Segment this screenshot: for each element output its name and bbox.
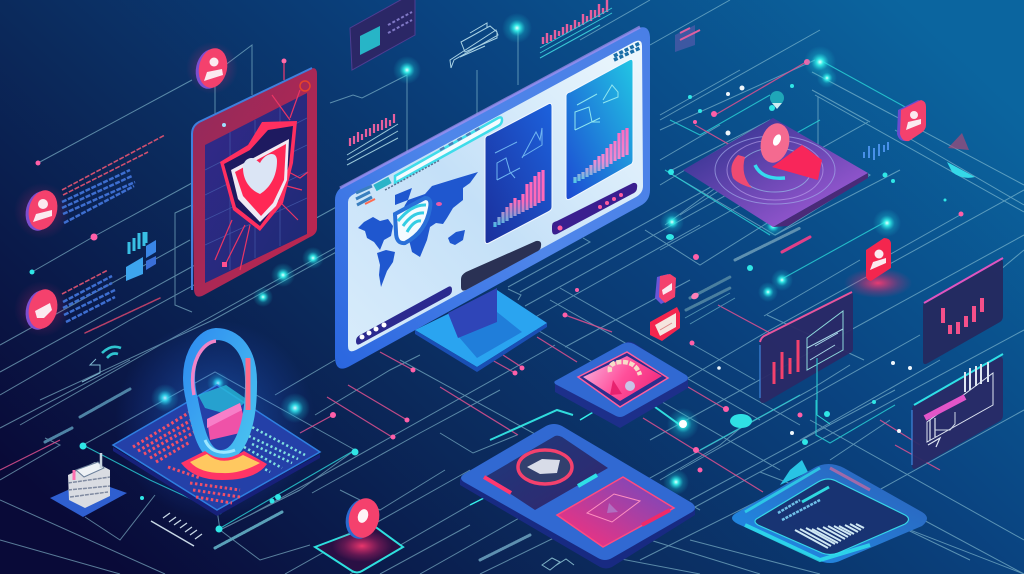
top printer line icon (450, 23, 498, 68)
antenna on tablet (282, 59, 286, 80)
logo glyphs (356, 180, 390, 205)
world map (358, 172, 478, 287)
icon: lock badge left (14, 281, 70, 337)
bottom purple control bar (356, 286, 452, 345)
white nodes (717, 86, 912, 435)
small status marks (222, 262, 227, 267)
chip top (113, 385, 320, 510)
glowing arc (181, 451, 267, 480)
camera glyph (300, 81, 310, 91)
glowing nodes (151, 13, 901, 505)
right purple bar (552, 183, 637, 234)
icon: person left (14, 183, 70, 239)
node dots (36, 58, 964, 472)
chip base side (113, 447, 320, 516)
chart panel A (760, 292, 853, 424)
shield white band (231, 139, 289, 222)
radar platform (683, 118, 868, 227)
corner glyphs (614, 43, 640, 60)
pink traces (0, 62, 940, 492)
chart panel two (566, 59, 633, 200)
radar pin (757, 120, 793, 166)
chip bottom dots (168, 467, 240, 503)
tablet body (192, 68, 317, 297)
chart panel C (912, 354, 1003, 469)
search bar (395, 117, 502, 183)
chip right dots (232, 425, 305, 472)
wifi shield (395, 198, 430, 243)
center chip icon (554, 342, 688, 428)
tablet blue edge (192, 68, 312, 290)
shield outer (220, 121, 297, 231)
dashed text traces (45, 228, 810, 560)
red pie (772, 145, 822, 180)
chart panel B (923, 258, 1003, 364)
wifi icon lower-left (82, 347, 121, 382)
monitor screen (348, 41, 643, 351)
globe node above radar (770, 91, 784, 109)
cyan node circle (730, 414, 752, 428)
decorative triangle top right (947, 133, 975, 178)
screen grid (205, 106, 307, 270)
cyan traces (83, 60, 925, 530)
circuit branches (215, 90, 308, 270)
pink arc (731, 155, 752, 188)
card: shield circle (484, 436, 608, 510)
lock body (207, 403, 244, 440)
small toolbar marks (385, 128, 480, 190)
lock shackle (189, 334, 251, 456)
chart panel one (485, 103, 552, 244)
icon: blue bar blocks (126, 232, 156, 281)
small badge: top (655, 274, 676, 304)
icon: person top (186, 42, 238, 94)
text block: left upper (62, 135, 165, 223)
dark bar (461, 241, 541, 291)
monitor (335, 27, 650, 369)
icon: person badge with glow (844, 238, 912, 298)
small badge: bottom (650, 307, 680, 341)
icon: location pin with cyan pad (315, 495, 403, 572)
small mini trace near badges (685, 291, 735, 324)
monitor stand (415, 288, 547, 372)
shield red core (235, 144, 286, 216)
shield dark band (224, 126, 293, 226)
card: video (557, 477, 674, 547)
text block: left lower (62, 270, 115, 322)
chip left dots (133, 412, 198, 462)
left mini bar chart (347, 114, 398, 165)
server icon (50, 453, 127, 517)
security tablet with shield (192, 68, 317, 297)
lock chip platform (113, 320, 320, 520)
top mini bar chart (540, 0, 612, 58)
cyan and white node dots (30, 84, 946, 532)
small glyph bottom (542, 558, 574, 570)
device plate with two cards (460, 424, 695, 568)
cyan arc (755, 165, 785, 178)
top-left mini card (350, 0, 415, 70)
chip teal window (198, 385, 248, 415)
monitor frame (335, 27, 650, 369)
small bar graphic beside radar (864, 142, 888, 160)
monitor top edge highlight (340, 27, 640, 188)
data plate bottom right (732, 460, 927, 563)
radar rings (715, 136, 835, 204)
barcode marks (151, 513, 202, 546)
tablet inner screen (205, 93, 307, 283)
icon: person badge top right (897, 100, 926, 141)
heart (243, 154, 277, 194)
top right mini glyph (675, 25, 700, 52)
